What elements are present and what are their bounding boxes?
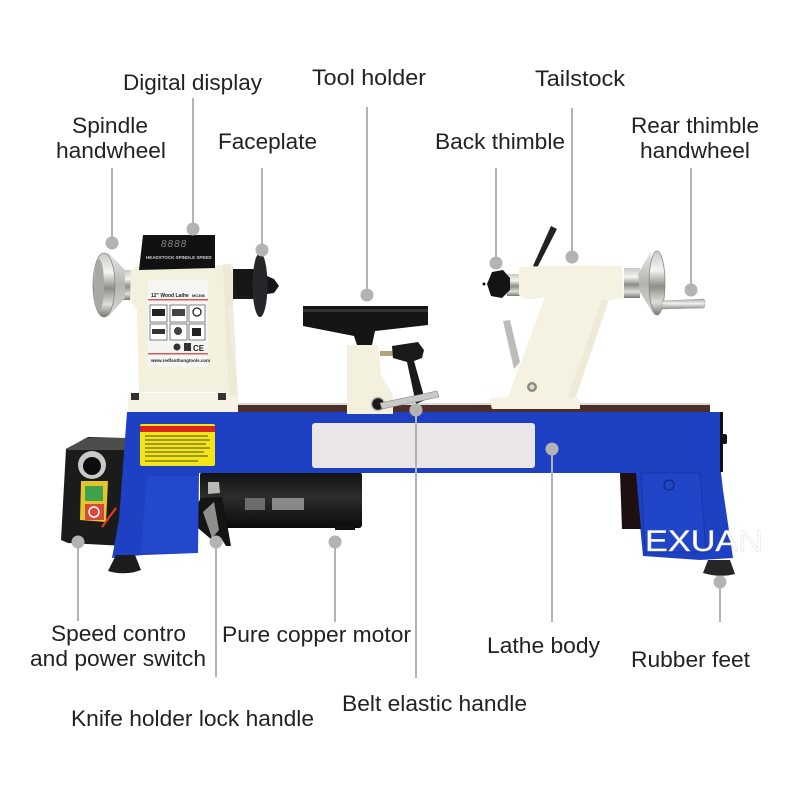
control box	[61, 437, 125, 546]
label: Lathe body	[487, 442, 600, 658]
label: Spindle handwheel: handwheel	[56, 138, 166, 163]
digital display	[139, 235, 215, 270]
blank nameplate	[312, 423, 535, 468]
label: Back thimble	[435, 129, 565, 270]
label: Faceplate	[218, 129, 317, 256]
digital display: 8888	[161, 239, 187, 250]
headstock	[120, 235, 256, 412]
label: Rear thimble handwheel: Rear thimble	[631, 113, 759, 138]
label: Speed control and power switch	[30, 536, 206, 671]
lathe bed body	[112, 412, 733, 560]
label: Lathe body: Lathe body	[487, 633, 600, 658]
tailstock	[489, 226, 624, 409]
label: Faceplate: Faceplate	[218, 129, 317, 154]
spec label: www.redfanthungtools.com	[150, 358, 210, 363]
label: Rubber feet	[631, 576, 750, 672]
rail behind bed	[236, 405, 710, 412]
label: Knife holder lock handle	[71, 536, 314, 731]
watermark: EXUAN	[645, 525, 763, 558]
label: Pure copper motor	[222, 536, 411, 647]
belt elastic handle	[372, 391, 439, 410]
label: Tailstock	[535, 66, 626, 264]
label: Tailstock: Tailstock	[535, 66, 626, 91]
label: Speed control and power switch: and power switch	[30, 646, 206, 671]
spec label: 12" Wood Lathe	[151, 293, 189, 299]
label: Tool holder: Tool holder	[312, 65, 426, 90]
rubber foot left	[108, 555, 141, 573]
label: Knife holder lock handle: Knife holder lock handle	[71, 706, 314, 731]
spec label: MC306	[192, 293, 206, 298]
digital display: HEADSTOCK SPINDLE SPEED	[146, 255, 212, 260]
label: Rubber feet: Rubber feet	[631, 647, 750, 672]
motor	[200, 472, 362, 530]
spec label: CE	[193, 344, 205, 353]
label: Belt elastic handle	[342, 404, 527, 716]
motor-side dark panel	[620, 473, 641, 529]
label: Digital display	[123, 70, 262, 236]
label: Spindle handwheel: Spindle	[72, 113, 148, 138]
lathe machine	[61, 226, 763, 576]
label: Digital display: Digital display	[123, 70, 262, 95]
faceplate	[236, 253, 279, 317]
rear thimble handwheel	[624, 251, 705, 315]
tool holder	[303, 306, 428, 414]
warning label	[140, 424, 215, 466]
label: Speed control and power switch: Speed contro	[51, 621, 186, 646]
label: Belt elastic handle: Belt elastic handle	[342, 691, 527, 716]
label: Rear thimble handwheel	[631, 113, 759, 296]
label: Tool holder	[312, 65, 426, 302]
rubber foot right	[703, 560, 735, 576]
label: Rear thimble handwheel: handwheel	[640, 138, 750, 163]
spec label	[148, 280, 210, 367]
spindle handwheel	[93, 252, 125, 317]
back thimble	[482, 270, 510, 298]
label: Pure copper motor: Pure copper motor	[222, 622, 411, 647]
label: Back thimble: Back thimble	[435, 129, 565, 154]
label: Spindle handwheel	[56, 113, 166, 250]
knife holder lock handle	[190, 497, 231, 546]
